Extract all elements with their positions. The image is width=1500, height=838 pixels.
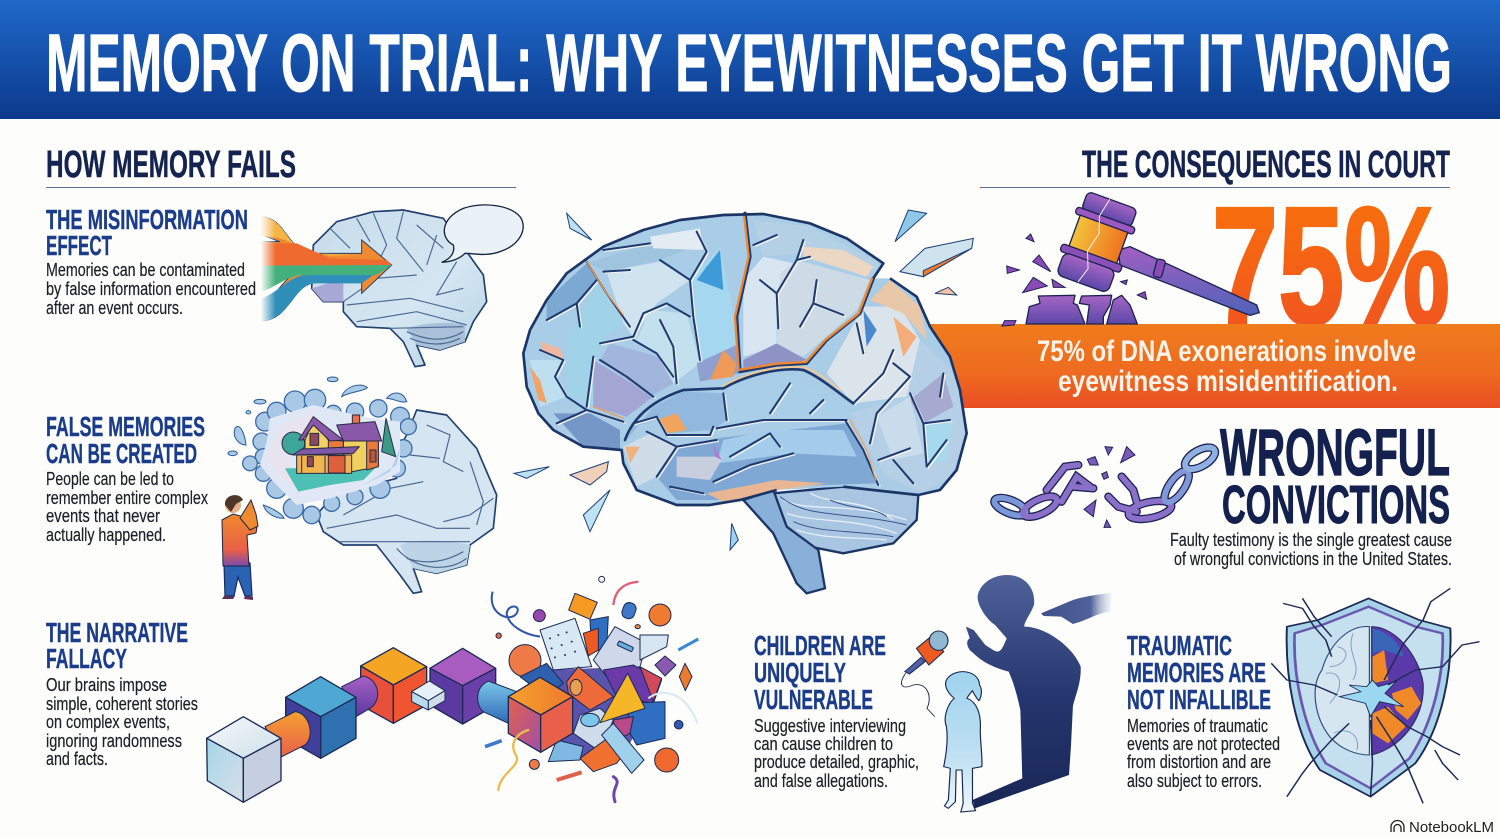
text block: children are uniquely vulnerable: and false allegations. bbox=[754, 771, 888, 791]
text block: false memories: events that never bbox=[46, 506, 160, 526]
header banner bbox=[0, 0, 1500, 119]
cube: blue bbox=[286, 677, 356, 758]
text block: the narrative fallacy: ignoring randomness bbox=[46, 731, 182, 751]
house bbox=[282, 415, 396, 492]
text block: traumatic memories: from distortion and are bbox=[1127, 752, 1271, 772]
connector tube: orange bbox=[265, 712, 310, 757]
sulci highlight bbox=[542, 233, 952, 495]
sweater bbox=[222, 514, 257, 566]
brain: burning half bbox=[1372, 627, 1423, 755]
microphone bbox=[902, 631, 948, 717]
text block: traumatic memories: events are not protected bbox=[1127, 734, 1280, 754]
connector tube: blue bbox=[478, 681, 517, 723]
text block: wrongful convictions bbox=[1170, 415, 1452, 569]
sulci lines bbox=[540, 232, 950, 493]
text block: children are uniquely vulnerable: Suggestive interviewing bbox=[754, 716, 906, 736]
cube: plain white bbox=[207, 717, 281, 802]
jeans bbox=[224, 563, 252, 596]
illustration: gavel and broken block bbox=[1002, 189, 1259, 326]
brain outline bbox=[523, 214, 967, 505]
cube: red bbox=[361, 648, 427, 723]
text block: traumatic memories: also subject to errors. bbox=[1127, 771, 1262, 791]
text block: the misinformation effect: after an event occurs. bbox=[46, 298, 183, 318]
text block: the narrative fallacy: on complex events, bbox=[46, 712, 170, 732]
illustration: broken chain bbox=[992, 443, 1218, 527]
cerebellum bbox=[773, 487, 918, 553]
broken sound block bbox=[1026, 295, 1137, 324]
illustration: false memory brain with house bbox=[228, 377, 497, 593]
illustration: cracked shield bbox=[1271, 588, 1480, 803]
gavel head bbox=[1052, 189, 1142, 295]
shoes bbox=[222, 596, 253, 600]
text block: the narrative fallacy: Our brains impose bbox=[46, 675, 167, 695]
text block: traumatic memories: NOT INFALLIBLE bbox=[1127, 684, 1271, 715]
text block: children are uniquely vulnerable: can cause children to bbox=[754, 734, 893, 754]
illustration: cracked central brain bbox=[523, 213, 967, 593]
chaotic debris bbox=[485, 576, 698, 802]
head bbox=[225, 497, 241, 513]
text block: the misinformation effect: Memories can be contaminated bbox=[46, 260, 245, 280]
text block: traumatic memories: Memories of traumatic bbox=[1127, 716, 1268, 736]
orange callout band: 75% of DNA exonerations involve bbox=[1037, 335, 1416, 368]
text block: children are uniquely vulnerable: CHILDREN ARE bbox=[754, 630, 886, 661]
brain stem bbox=[743, 490, 825, 593]
shield body bbox=[1287, 598, 1451, 797]
cube: purple bbox=[430, 648, 496, 724]
text block: traumatic memories bbox=[1127, 630, 1280, 791]
brain: cool half bbox=[1315, 627, 1369, 755]
text block: the narrative fallacy: THE NARRATIVE bbox=[46, 617, 188, 648]
illustration: person looking up bbox=[222, 495, 258, 600]
illustration: narrative chain of cubes bbox=[207, 576, 698, 802]
misinformation arrow streams bbox=[262, 217, 392, 321]
brain facets bbox=[523, 214, 967, 505]
impact star bbox=[1339, 680, 1404, 717]
speech bubble bbox=[442, 205, 523, 262]
text block: false memories: People can be led to bbox=[46, 469, 174, 489]
gavel handle bbox=[1118, 247, 1259, 315]
text block: traumatic memories: MEMORIES ARE bbox=[1127, 657, 1266, 688]
text block: the misinformation effect bbox=[46, 204, 256, 318]
brain bbox=[317, 410, 497, 593]
cube: small light bbox=[412, 681, 445, 710]
connector tube: purple bbox=[342, 676, 378, 717]
text block: the narrative fallacy: simple, coherent stories bbox=[46, 694, 198, 714]
girl bbox=[944, 672, 982, 812]
text block: traumatic memories: TRAUMATIC bbox=[1127, 630, 1232, 661]
text block: the narrative fallacy bbox=[46, 617, 198, 769]
memory cloud bbox=[243, 389, 416, 524]
NotebookLM mark: NotebookLM bbox=[1409, 819, 1494, 836]
cube: orange bbox=[508, 677, 573, 752]
shadow of adult/boy bbox=[966, 575, 1081, 808]
text block: the narrative fallacy: FALLACY bbox=[46, 643, 127, 674]
raised arm bbox=[240, 500, 258, 530]
heading: how memory fails: HOW MEMORY FAILS bbox=[46, 144, 296, 186]
orange callout band bbox=[930, 324, 1500, 408]
text block: false memories: CAN BE CREATED bbox=[46, 438, 197, 469]
text block: false memories: FALSE MEMORIES bbox=[46, 411, 205, 442]
text block: false memories: remember entire complex bbox=[46, 488, 208, 508]
text block: children are uniquely vulnerable: UNIQUELY bbox=[754, 657, 846, 688]
text block: children are uniquely vulnerable: produce detailed, graphic, bbox=[754, 752, 919, 772]
text block: false memories bbox=[46, 411, 208, 545]
text block: children are uniquely vulnerable: VULNERABLE bbox=[754, 684, 873, 715]
text block: the narrative fallacy: and facts. bbox=[46, 749, 108, 769]
cloud wisps bbox=[228, 377, 407, 518]
text block: the misinformation effect: by false information encountered bbox=[46, 279, 256, 299]
icon: notebook logo bbox=[1391, 820, 1404, 832]
text block: false memories: actually happened. bbox=[46, 525, 166, 545]
illustration: misinformation brain with arrow bbox=[261, 205, 523, 367]
block shards bbox=[1002, 234, 1147, 326]
small brain bbox=[312, 210, 487, 367]
pointing hand bbox=[1041, 593, 1112, 624]
orange callout band: eyewitness misidentification. bbox=[1058, 365, 1398, 398]
text block: the misinformation effect: THE MISINFORMATION bbox=[46, 204, 248, 235]
orange cracks bbox=[587, 213, 876, 480]
glass shards around brain bbox=[514, 210, 973, 550]
text block: the misinformation effect: EFFECT bbox=[46, 230, 112, 261]
text block: children are uniquely vulnerable bbox=[754, 630, 919, 791]
cracks bbox=[1271, 588, 1480, 803]
illustration: child silhouette under questioning bbox=[902, 575, 1112, 812]
